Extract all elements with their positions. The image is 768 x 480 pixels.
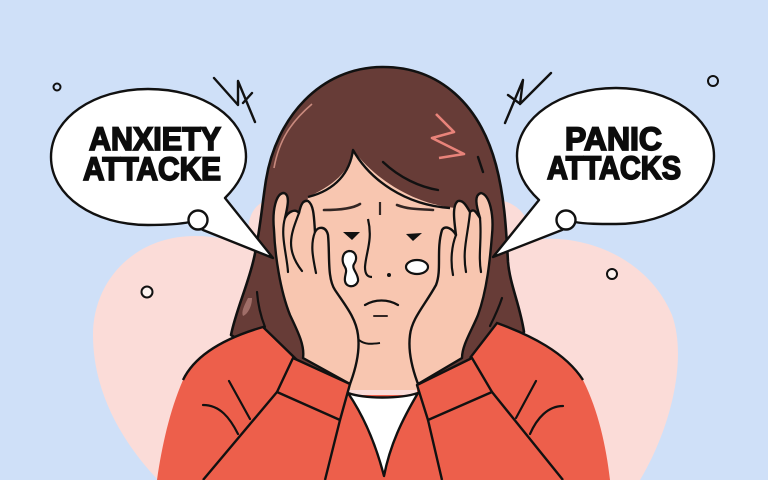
bubble connector circle [556, 210, 576, 230]
jacket folds right [516, 381, 563, 434]
speech bubble: anxiety attacks [51, 89, 273, 258]
chin [359, 340, 380, 344]
lower lip [374, 315, 387, 317]
hair zigzag accent [432, 114, 464, 158]
bubble text line two: ATTACKE [83, 151, 221, 187]
right eye [406, 233, 422, 241]
forehead crease [379, 202, 381, 215]
jacket [157, 323, 610, 480]
bubble text: PANIC [565, 121, 662, 157]
right brow [397, 205, 433, 210]
pink blob behind figure [93, 200, 678, 480]
left cuff [277, 358, 350, 420]
left hand [273, 193, 359, 384]
left finger lines [283, 213, 316, 273]
right hand [409, 193, 493, 384]
left eye [343, 232, 360, 240]
right tear [406, 260, 428, 274]
jacket folds left [203, 381, 250, 434]
icon: left stress bolt [214, 78, 255, 122]
decorative circle: mid right [607, 269, 617, 279]
hair [231, 67, 524, 380]
hair strand right [490, 298, 502, 326]
decorative circle: top right [708, 76, 718, 86]
hair shadow patch [242, 298, 252, 316]
right finger lines [452, 212, 481, 275]
bubble text line two: ATTACKS [547, 150, 681, 186]
decorative circle: mid left [142, 286, 152, 298]
nostril [387, 273, 391, 277]
icon: right stress bolt [505, 73, 551, 123]
speech bubble: panic attacks [493, 88, 714, 257]
right cuff [417, 358, 492, 420]
face [300, 150, 483, 390]
decorative circle: top left [54, 84, 60, 90]
fringe strand [383, 157, 483, 190]
bubble text: ANXIETY [89, 121, 221, 157]
nose [365, 219, 372, 277]
jacket arm seam left [203, 392, 340, 480]
mouth [365, 300, 398, 305]
bubble connector circle [188, 210, 208, 230]
left brow [324, 204, 360, 210]
left tear [343, 251, 358, 286]
fringe outline [308, 150, 450, 208]
jacket arm seam right [428, 392, 563, 480]
shirt [348, 393, 418, 476]
hair highlight [274, 104, 312, 168]
hair strand left [257, 292, 265, 327]
